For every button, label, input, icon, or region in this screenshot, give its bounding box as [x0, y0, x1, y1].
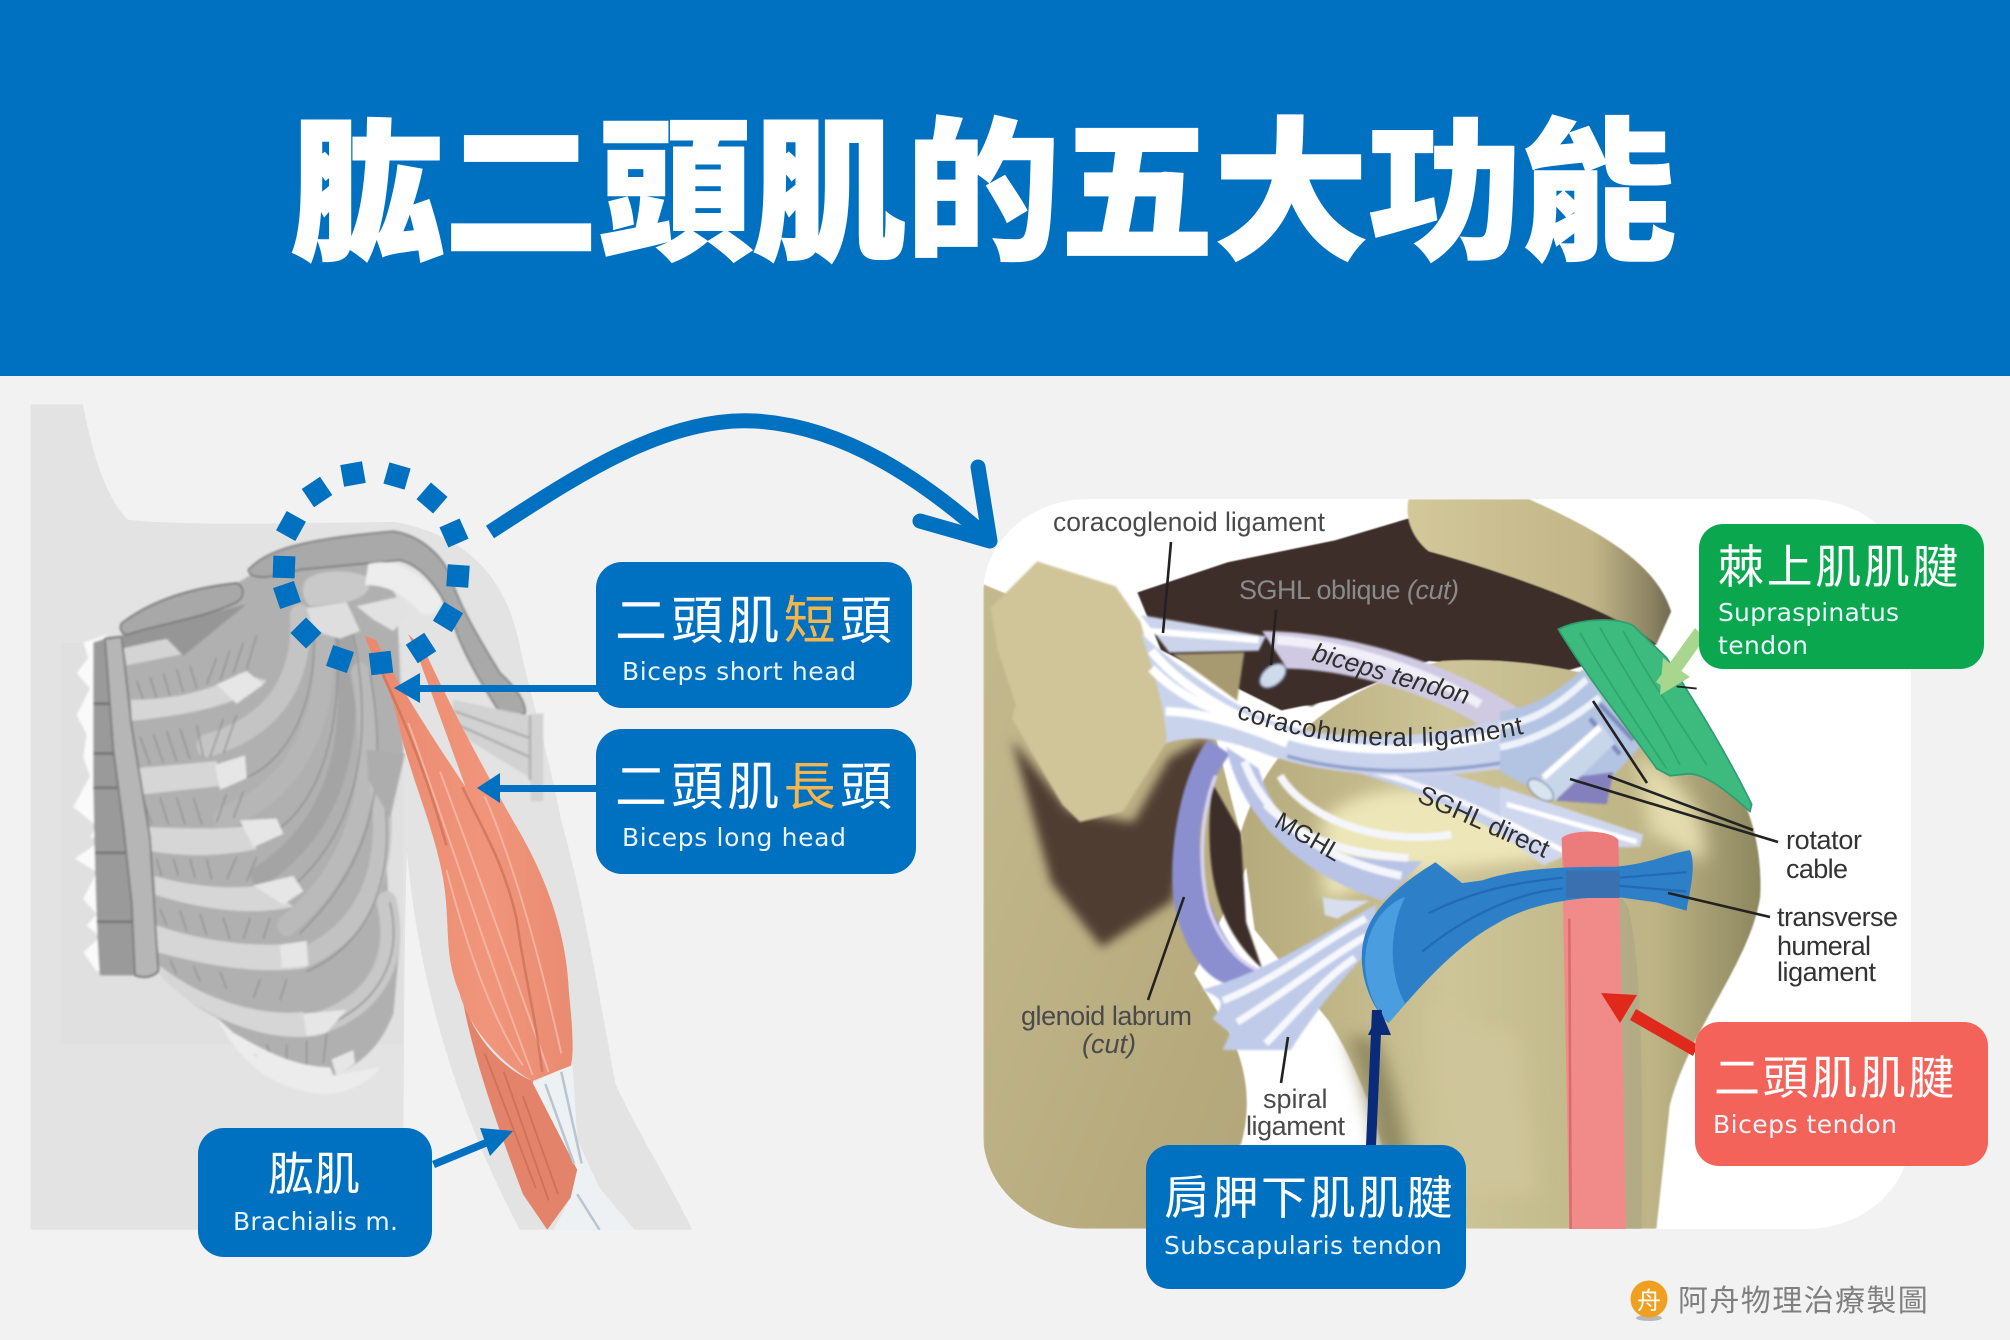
anatomy labels: humeral [1777, 931, 1871, 961]
panel: shoulder joint illustration [983, 499, 1911, 1229]
glenoid shadow [1012, 736, 1209, 947]
arrow: to biceps short head [394, 673, 602, 703]
humerus [1241, 660, 1761, 1229]
right side ligaments and supraspinatus [1500, 620, 1752, 1231]
anatomy labels: ligament [1246, 1111, 1345, 1141]
callout: biceps tendon [1695, 1022, 1988, 1166]
anatomy labels [1022, 512, 1897, 1163]
serratus fan bands [207, 616, 394, 1033]
costal dark band [93, 637, 140, 975]
callout: subscapularis tendon: 肩胛下肌肌腱 [1164, 1172, 1455, 1224]
anatomy labels: biceps tendon [1309, 637, 1473, 710]
callout: subscapularis tendon: Subscapularis tendon [1164, 1231, 1442, 1260]
lower arm shadow [367, 750, 405, 818]
callout: biceps tendon: 二頭肌肌腱 [1714, 1052, 1957, 1104]
callout: biceps long head: Biceps long head [622, 823, 846, 852]
tendon stump [1258, 662, 1288, 690]
coracoglenoid ligament [1141, 615, 1266, 652]
ligaments [991, 561, 1540, 1050]
leader stub [1677, 686, 1697, 689]
biceps tendon band [1262, 631, 1523, 726]
coracoid process [991, 561, 1166, 822]
long and short heads [365, 634, 573, 1081]
callout: subscapularis tendon [1146, 1145, 1466, 1289]
arrow: to biceps long head [477, 773, 602, 803]
bone highlights [1322, 754, 1704, 1215]
upper chest patches [123, 639, 183, 665]
callout: supraspinatus tendon: Supraspinatus [1718, 598, 1899, 627]
callout: biceps long head: 二頭肌長頭 [615, 759, 896, 817]
leader lines [1148, 542, 1778, 1083]
anatomy labels: cable [1786, 854, 1848, 884]
supraspinatus tendon [1558, 620, 1752, 811]
tendon patches [215, 671, 355, 1077]
anatomy labels: coracoglenoid ligament [1053, 507, 1325, 537]
acromion [1408, 499, 1671, 645]
dark joint space [1137, 518, 1656, 710]
coracohumeral ligament [1141, 633, 1540, 775]
header banner [0, 0, 2010, 376]
brachialis [462, 998, 577, 1230]
callout: supraspinatus tendon: tendon [1718, 631, 1808, 660]
intercostal hatching [137, 635, 327, 1067]
triceps stump [450, 700, 543, 801]
anatomy labels: SGHL oblique (cut) [1239, 575, 1459, 605]
callout: biceps short head: 二頭肌短頭 [615, 593, 896, 651]
icon: studio logo [1630, 1280, 1668, 1321]
anatomy labels: rotator [1786, 825, 1862, 855]
callout: biceps long head [596, 729, 916, 874]
callout: brachialis [198, 1128, 432, 1257]
callout: supraspinatus tendon: 棘上肌肌腱 [1718, 541, 1961, 593]
title: 肱二頭肌的五大功能 [290, 108, 1676, 280]
callout: brachialis: Brachialis m. [233, 1207, 398, 1236]
credit text: 阿舟物理治療製圖 [1678, 1285, 1929, 1318]
icon: dashed circle around shoulder [273, 461, 470, 675]
mghl [1226, 747, 1423, 901]
dark patch under tendon [1276, 690, 1339, 706]
scapula and acromion [248, 531, 525, 716]
anatomy labels: spiral [1263, 1084, 1328, 1114]
biceps tendon in pink [1562, 832, 1642, 1231]
sghl direct [1360, 772, 1503, 836]
gap behind labrum [1209, 783, 1262, 969]
sternum [105, 637, 158, 977]
transverse humeral ligament in blue [1362, 850, 1693, 1023]
anatomy labels: transverse [1777, 902, 1898, 932]
tan patch between ligaments [1173, 652, 1244, 701]
biceps brachii and brachialis muscles [365, 634, 635, 1230]
arrow: big curved arrow to detail panel [490, 421, 990, 541]
arrow: to biceps tendon [1601, 993, 1698, 1056]
anatomy labels: glenoid labrum [1021, 1001, 1192, 1031]
anatomy labels: MGHL [1270, 807, 1347, 867]
callout: biceps short head [596, 562, 912, 708]
arrow: to supraspinatus [1656, 628, 1705, 695]
arrow: to subscapularis [1366, 1009, 1391, 1146]
arrow: to brachialis [432, 1128, 513, 1168]
callout: biceps short head: Biceps short head [622, 657, 856, 686]
anatomy labels: SGHL direct [1414, 779, 1555, 864]
labrum [1172, 740, 1262, 985]
clavicle [120, 583, 243, 635]
humeral head [303, 571, 369, 606]
anatomy labels: (cut) [1082, 1029, 1136, 1059]
panel white base [983, 499, 1911, 1229]
glenoid bone [983, 584, 1248, 1229]
rib bands [131, 673, 333, 1077]
panel: arm and torso anatomy illustration [31, 404, 692, 1230]
bones and dark joint space [983, 499, 1761, 1229]
torso muscles and ribs [73, 531, 543, 1094]
anatomy labels: coracohumeral ligament [1238, 706, 1524, 750]
body silhouette [31, 404, 692, 1230]
callout: supraspinatus tendon [1699, 524, 1984, 669]
callout: brachialis: 肱肌 [268, 1148, 360, 1200]
ligament ends [1500, 669, 1640, 801]
icon: studio logo: 舟 [1637, 1288, 1661, 1315]
distal tendon [533, 1066, 635, 1230]
callout: biceps tendon: Biceps tendon [1713, 1110, 1897, 1139]
anatomy labels: ligament [1777, 957, 1876, 987]
spiral ligament fan [1201, 904, 1376, 1050]
rib cartilage fringe [73, 635, 107, 972]
